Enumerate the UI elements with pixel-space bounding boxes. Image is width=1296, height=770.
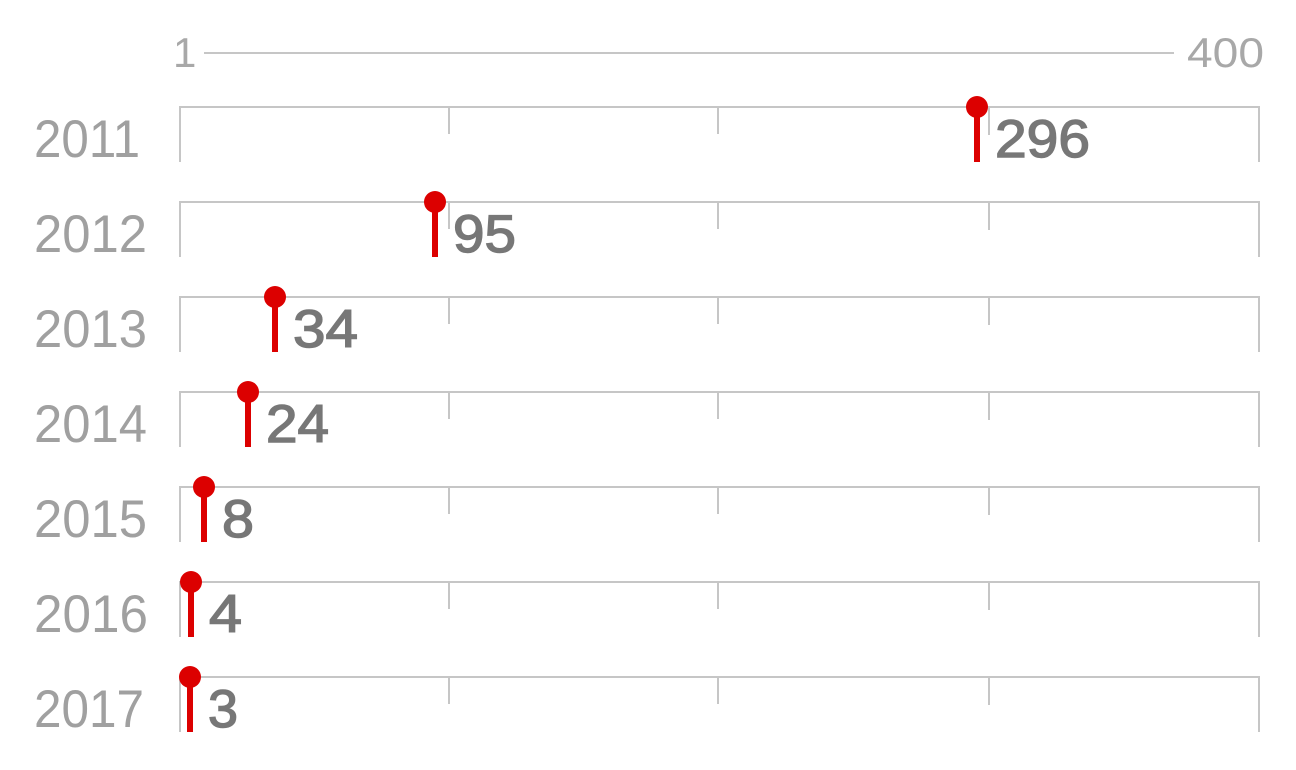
row: 2016 xyxy=(34,571,1259,644)
axis scale xyxy=(173,29,1264,76)
row: 2015: 8 xyxy=(222,490,254,549)
row: 2012: 95 xyxy=(453,205,516,264)
row: 2013: 2013 xyxy=(34,300,147,359)
row: 2016: 4 xyxy=(209,585,242,644)
row: 2011 xyxy=(34,96,1259,169)
axis scale: 400 xyxy=(1187,29,1264,76)
row: 2014: 2014 xyxy=(34,395,147,454)
row: 2012 xyxy=(34,191,1259,264)
row: 2015 xyxy=(34,476,1259,549)
row: 2015: 2015 xyxy=(34,490,147,549)
row: 2017: 2017 xyxy=(34,680,144,739)
row: 2013: 34 xyxy=(293,300,358,359)
row: 2011: 2011 xyxy=(34,110,140,169)
row: 2014: 24 xyxy=(266,395,329,454)
row: 2012: 2012 xyxy=(34,205,147,264)
axis scale: 1 xyxy=(173,29,196,76)
row: 2011: 296 xyxy=(995,110,1090,169)
row: 2016: 2016 xyxy=(34,585,148,644)
row: 2017: 3 xyxy=(208,680,238,739)
row: 2013 xyxy=(34,286,1259,359)
row: 2014 xyxy=(34,381,1259,454)
row: 2017 xyxy=(34,666,1259,739)
